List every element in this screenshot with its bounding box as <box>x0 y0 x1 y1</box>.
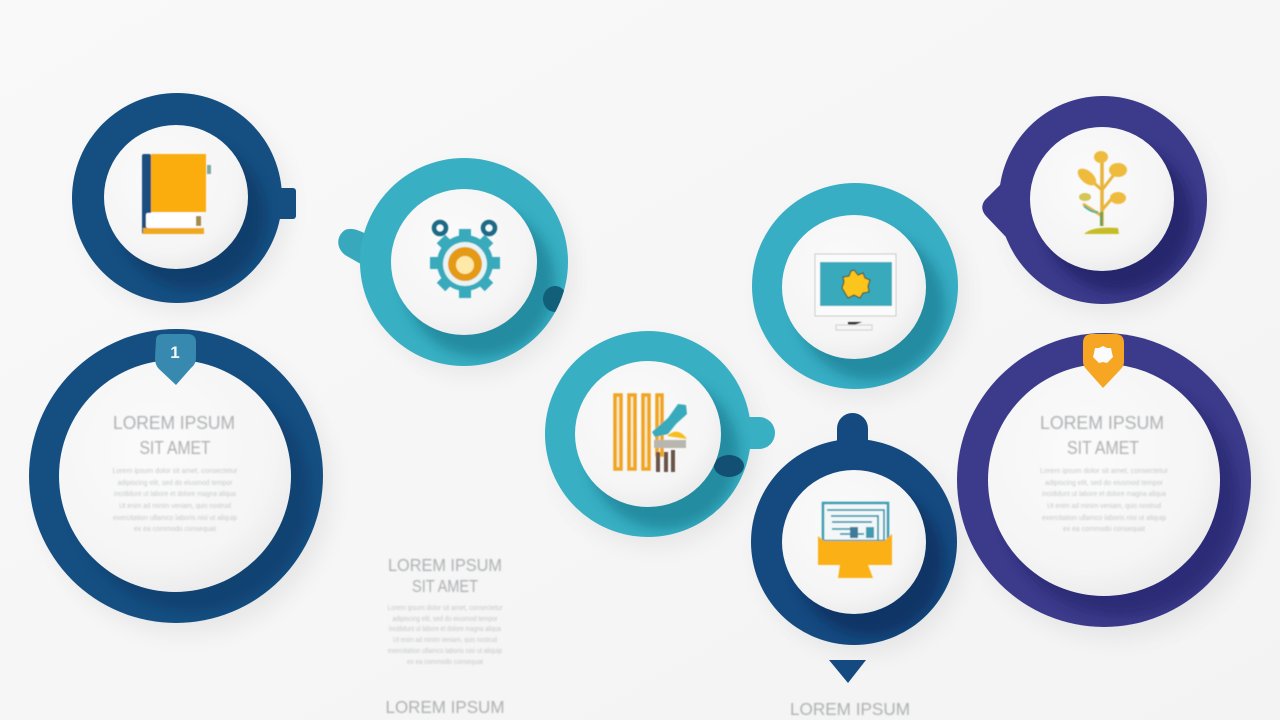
badge tab left <box>338 229 392 270</box>
icon: plant <box>1075 151 1127 234</box>
badge tab left <box>982 130 1040 270</box>
body text: ex ea commodo consequat <box>134 526 216 533</box>
body text: adipiscing elit, sed do eiusmod tempor <box>118 480 233 487</box>
body text: Lorem ipsum dolor sit amet, consectetur <box>112 468 238 475</box>
marker: step number: 1 <box>170 343 180 362</box>
heading: LOREM IPSUM <box>388 555 502 575</box>
icon: desktop computer <box>818 503 892 578</box>
body text: ex ea commodo consequat <box>1063 526 1145 533</box>
panel: purple large text circle <box>957 333 1260 638</box>
body text: Ut enim ad minim veniam, quis nostrud <box>1047 503 1161 510</box>
marker: orange pin <box>1083 334 1124 388</box>
panel: teal gear badge <box>338 158 575 375</box>
icon: book <box>142 154 211 234</box>
text block: center column <box>388 555 503 666</box>
panel: teal tools badge <box>545 331 775 546</box>
body text: exercitation ullamco laboris nisi ut aliquip <box>1042 515 1166 522</box>
arrow: down triangle <box>829 660 866 683</box>
body text: adipiscing elit, sed do eiusmod tempor <box>392 616 498 623</box>
body text <box>112 468 238 533</box>
badge tab right <box>730 417 775 449</box>
panel: navy book badge <box>72 93 296 312</box>
body text: exercitation ullamco laboris nisi ut aliquip <box>388 648 502 655</box>
icon: gears <box>430 222 500 298</box>
body text: exercitation ullamco laboris nisi ut aliquip <box>113 515 237 522</box>
body text: Ut enim ad minim veniam, quis nostrud <box>393 637 497 644</box>
body text: Lorem ipsum dolor sit amet, consectetur <box>1040 468 1169 475</box>
icon: monitor with star <box>815 254 896 330</box>
body text: incididunt ut labore et dolore magna aliqua <box>1042 491 1166 498</box>
panel: purple plant badge <box>982 96 1214 313</box>
panel: purple large text circle: SIT AMET <box>1067 437 1139 458</box>
body text: incididunt ut labore et dolore magna aliqua <box>389 626 501 633</box>
marker: step number <box>155 334 196 385</box>
heading: bottom left caption: LOREM IPSUM <box>386 697 504 717</box>
panel: teal monitor badge <box>752 183 965 398</box>
body text: Ut enim ad minim veniam, quis nostrud <box>119 503 231 510</box>
text block: center column: SIT AMET <box>412 576 478 596</box>
body text <box>1040 468 1169 533</box>
icon: pencils and brush <box>615 395 687 472</box>
body text: adipiscing elit, sed do eiusmod tempor <box>1045 480 1164 487</box>
heading: LOREM IPSUM <box>113 412 235 433</box>
body text: Lorem ipsum dolor sit amet, consectetur <box>388 605 503 612</box>
body text <box>388 605 503 666</box>
badge tab top <box>837 413 868 463</box>
heading: LOREM IPSUM <box>1040 412 1164 433</box>
heading: bottom right caption: LOREM IPSUM <box>790 699 910 719</box>
panel: navy computer badge <box>751 413 964 654</box>
badge tab right <box>270 188 296 219</box>
body text: ex ea commodo consequat <box>407 659 483 666</box>
body text: incididunt ut labore et dolore magna aliqua <box>114 491 236 498</box>
panel: navy large text circle: SIT AMET <box>140 437 210 458</box>
panel: navy large text circle <box>29 329 332 634</box>
